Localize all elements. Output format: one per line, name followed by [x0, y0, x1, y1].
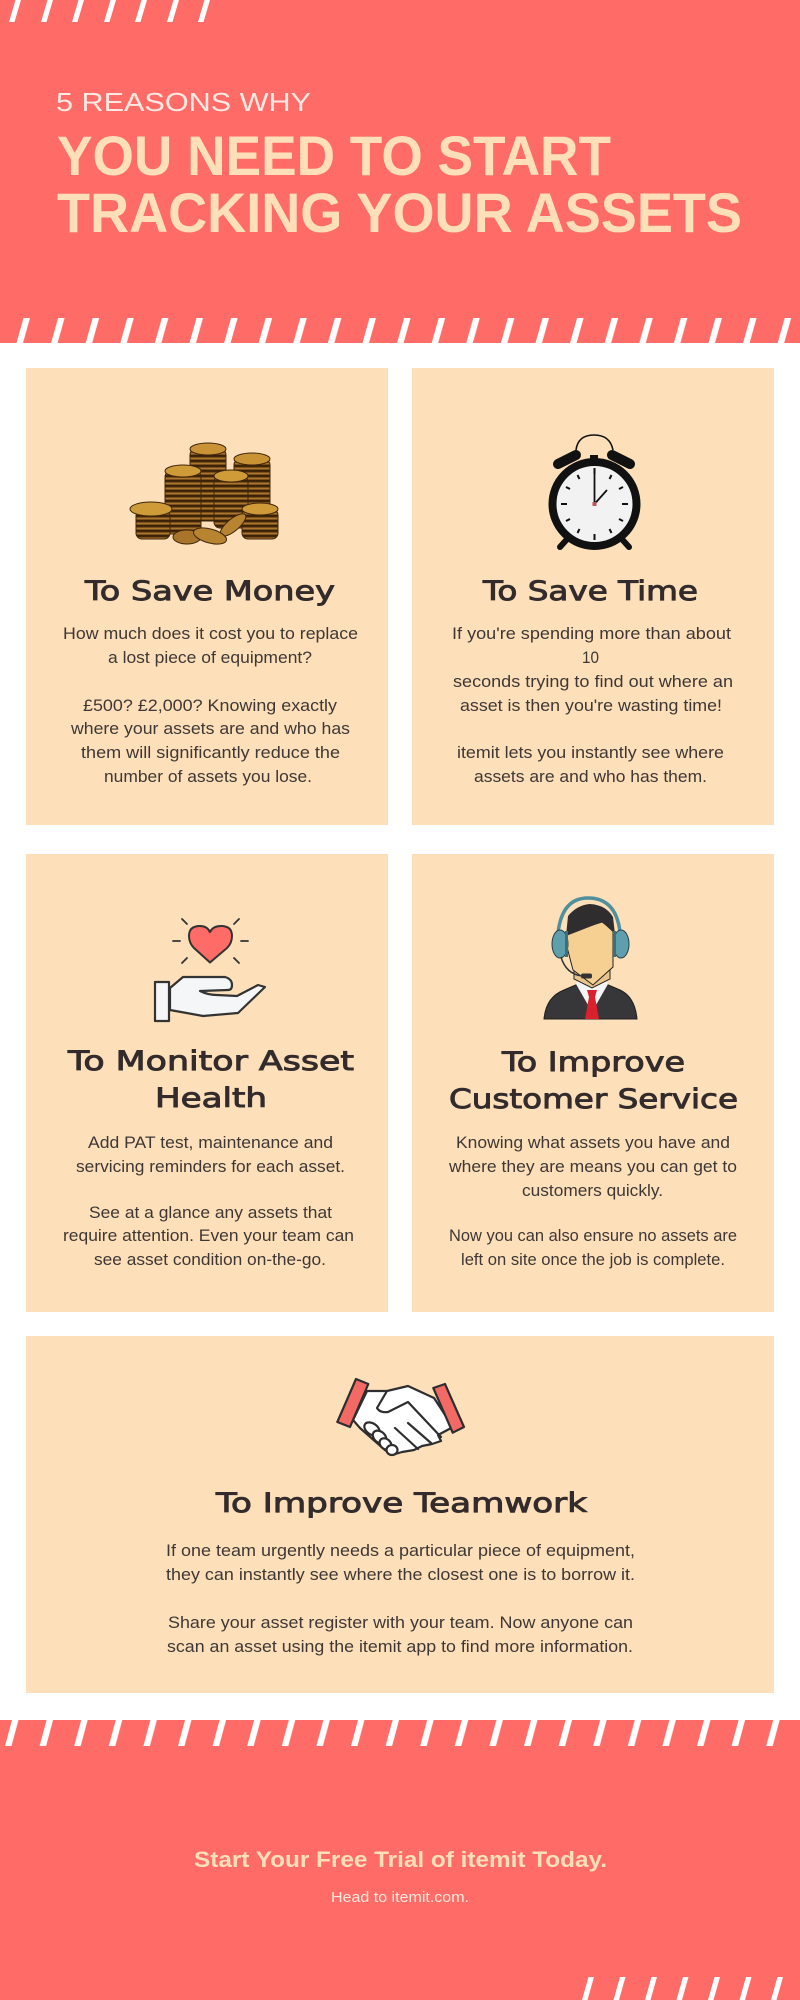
- panel: to improve teamwork: [26, 1336, 774, 1693]
- text: to improve customer service: left on site once the job is complete.: [461, 1251, 725, 1269]
- header band: [0, 0, 800, 343]
- footer band: [0, 1720, 800, 2000]
- title: YOU NEED TO START: [57, 124, 611, 187]
- panel: to save money: [26, 368, 388, 825]
- icon: handshake: [337, 1379, 464, 1455]
- panel: to improve customer service: [412, 854, 774, 1312]
- text: to improve teamwork: Share your asset register with your team. Now anyone can: [168, 1614, 633, 1632]
- icon: heart in hand: [155, 919, 265, 1021]
- text: to monitor asset health: See at a glance any assets that: [89, 1204, 332, 1222]
- text: to monitor asset health: Add PAT test, maintenance and: [88, 1134, 333, 1152]
- text: to improve teamwork: If one team urgently needs a particular piece of equipment,: [166, 1542, 635, 1560]
- text: to monitor asset health: see asset condition on-the-go.: [94, 1251, 326, 1269]
- text: to save money: £500? £2,000? Knowing exactly: [83, 697, 338, 715]
- text: to improve customer service: customers quickly.: [522, 1182, 663, 1200]
- subtitle: 5 REASONS WHY: [56, 87, 311, 117]
- text: to improve teamwork: [166, 1542, 635, 1656]
- icon: coin stacks: [130, 443, 278, 547]
- text: to improve teamwork: they can instantly see where the closest one is to borrow it.: [166, 1566, 635, 1584]
- text: to improve customer service: where they are means you can get to: [448, 1158, 737, 1176]
- text: to improve customer service: [448, 1134, 737, 1269]
- text: to save money: number of assets you lose.: [104, 768, 312, 786]
- heading: to monitor asset health: Health: [155, 1083, 267, 1114]
- panel: to save time: [412, 368, 774, 825]
- text: to save time: assets are and who has them.: [474, 768, 707, 786]
- panel: to monitor asset health: [26, 854, 388, 1312]
- text: to save time: itemit lets you instantly see where: [457, 744, 724, 762]
- title: TRACKING YOUR ASSETS: [57, 181, 742, 244]
- text: to save time: 10: [582, 649, 599, 667]
- text: to improve customer service: Knowing what assets you have and: [456, 1134, 730, 1152]
- heading: to save time: To Save Time: [482, 576, 698, 607]
- heading: to save money: To Save Money: [84, 576, 335, 607]
- icon: headset agent: [544, 898, 637, 1019]
- heading: to monitor asset health: [67, 1046, 354, 1114]
- text: to monitor asset health: servicing reminders for each asset.: [76, 1158, 345, 1176]
- title: [57, 124, 742, 244]
- text: to save money: a lost piece of equipment?: [108, 649, 312, 667]
- text: to save money: them will significantly reduce the: [81, 744, 340, 762]
- call to action: Start Your Free Trial of itemit Today.: [194, 1847, 607, 1872]
- text: to improve teamwork: scan an asset using the itemit app to find more information.: [167, 1638, 633, 1656]
- text: to monitor asset health: [63, 1134, 354, 1269]
- icon: alarm clock: [552, 435, 636, 547]
- text: to save time: If you're spending more than about: [452, 625, 731, 643]
- text: to save money: [63, 625, 358, 786]
- heading: to improve teamwork: To Improve Teamwork: [215, 1488, 587, 1519]
- heading: to improve customer service: [449, 1047, 738, 1115]
- text: to improve customer service: Now you can also ensure no assets are: [449, 1227, 737, 1245]
- text: to save time: asset is then you're wasting time!: [460, 697, 722, 715]
- text: to save time: seconds trying to find out where an: [453, 673, 733, 691]
- heading: to improve customer service: Customer Service: [449, 1084, 738, 1115]
- text: to save money: How much does it cost you to replace: [63, 625, 358, 643]
- website line: Head to itemit.com.: [331, 1889, 469, 1906]
- text: to save time: [452, 625, 733, 786]
- heading: to improve customer service: To Improve: [501, 1047, 685, 1078]
- text: to save money: where your assets are and who has: [70, 720, 350, 738]
- heading: to monitor asset health: To Monitor Asset: [67, 1046, 354, 1077]
- text: to monitor asset health: require attention. Even your team can: [63, 1227, 354, 1245]
